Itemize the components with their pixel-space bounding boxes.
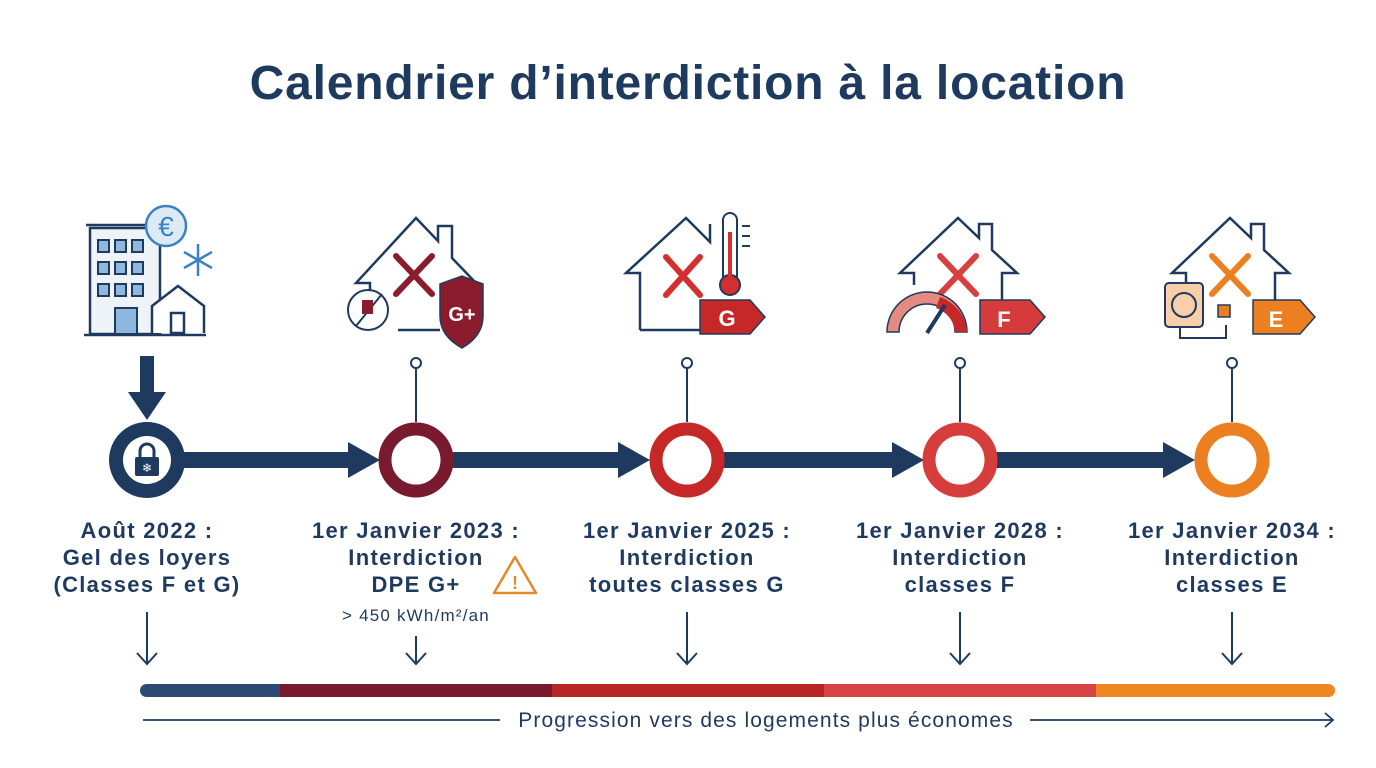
- icon: house F gauge: [887, 218, 1045, 334]
- gradient progress bar: [140, 684, 1335, 697]
- label: 2023: 1er Janvier 2023 :: [312, 518, 520, 543]
- timeline arrows: [180, 442, 1195, 478]
- icon: house G+: G+: [448, 304, 476, 326]
- icon: warning: !: [512, 573, 518, 593]
- progression caption: Progression vers des logements plus économes: [518, 709, 1014, 732]
- label: 2025: Interdiction: [619, 545, 755, 570]
- title: Calendrier d’interdiction à la location: [250, 57, 1126, 110]
- label: 2023: Interdiction: [348, 545, 484, 570]
- label: 2022: Août 2022 :: [81, 518, 213, 543]
- icon: house E plug: [1165, 218, 1315, 338]
- label: 2023: DPE G+: [371, 572, 461, 597]
- node: 2028: [929, 429, 991, 491]
- label: 2034: classes E: [1176, 572, 1288, 597]
- label: 2034: Interdiction: [1164, 545, 1300, 570]
- label: 2025: 1er Janvier 2025 :: [583, 518, 791, 543]
- arrow: down to first node: [128, 356, 166, 420]
- node: 2022 lock: [109, 422, 185, 498]
- icon: house F gauge: F: [997, 307, 1011, 332]
- icon: house E plug: E: [1269, 307, 1283, 332]
- progression caption: [143, 709, 1333, 732]
- label: 2028: Interdiction: [892, 545, 1028, 570]
- pins: [411, 358, 1237, 422]
- icon: house G thermometer: [626, 213, 765, 334]
- label: 2028: 1er Janvier 2028 :: [856, 518, 1064, 543]
- icon: house G thermometer: G: [718, 306, 736, 331]
- node: 2025: [656, 429, 718, 491]
- node: 2023: [385, 429, 447, 491]
- sub-label: kWh: > 450 kWh/m²/an: [342, 606, 490, 625]
- label: 2022: (Classes F et G): [53, 572, 241, 597]
- label: 2034: 1er Janvier 2034 :: [1128, 518, 1336, 543]
- label: 2022: Gel des loyers: [63, 545, 231, 570]
- node: 2022 lock: ❄: [142, 461, 152, 475]
- icon: building with euro and snowflake: €: [158, 211, 174, 242]
- down arrows: [137, 612, 1242, 664]
- node: 2034: [1201, 429, 1263, 491]
- icon: warning: [494, 557, 536, 593]
- label: 2028: classes F: [905, 572, 1015, 597]
- icon: building with euro and snowflake: [84, 206, 212, 335]
- label: 2025: toutes classes G: [589, 572, 785, 597]
- icon: house G+: [348, 218, 483, 348]
